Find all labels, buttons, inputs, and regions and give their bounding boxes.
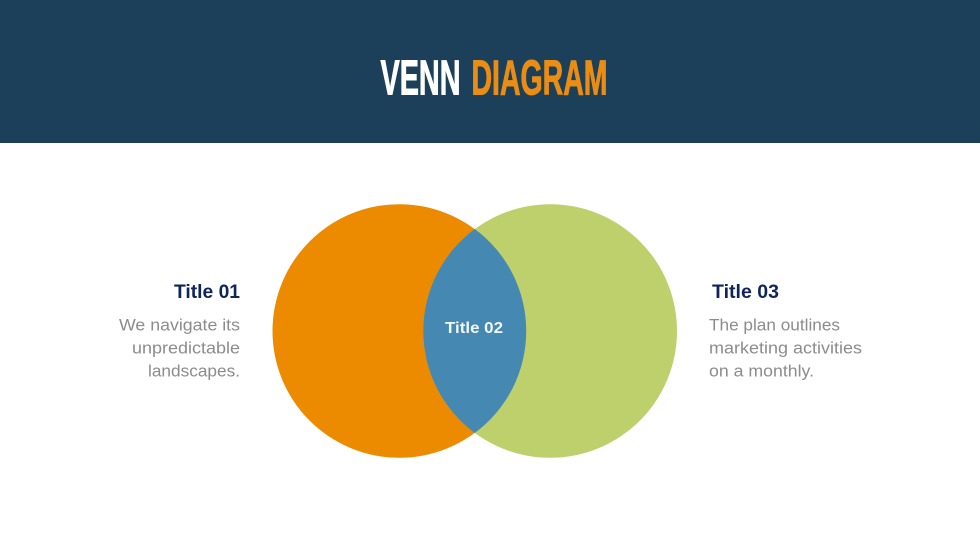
heading: Title 03: Title 03 — [712, 282, 779, 303]
heading: Title 01: Title 01 — [174, 282, 240, 303]
description: left: unpredictable — [132, 338, 240, 358]
title: DIAGRAM — [472, 52, 608, 106]
left text block — [119, 282, 240, 380]
description: left — [119, 316, 240, 380]
venn diagram — [272, 204, 677, 458]
title: VENN — [380, 52, 460, 106]
label: Title 02: Title 02 — [445, 320, 503, 337]
circle: right green — [423, 204, 677, 458]
overlap: blue lens — [423, 229, 526, 433]
title — [380, 52, 608, 106]
description: right: The plan outlines — [709, 316, 840, 334]
description: left: landscapes. — [148, 362, 240, 380]
circle: left orange — [272, 204, 526, 458]
description: right: on a monthly. — [709, 362, 814, 380]
description: right: marketing activities — [709, 338, 862, 358]
right text block — [709, 282, 862, 380]
description: right — [709, 316, 862, 380]
header band — [0, 0, 980, 143]
description: left: We navigate its — [119, 316, 240, 334]
